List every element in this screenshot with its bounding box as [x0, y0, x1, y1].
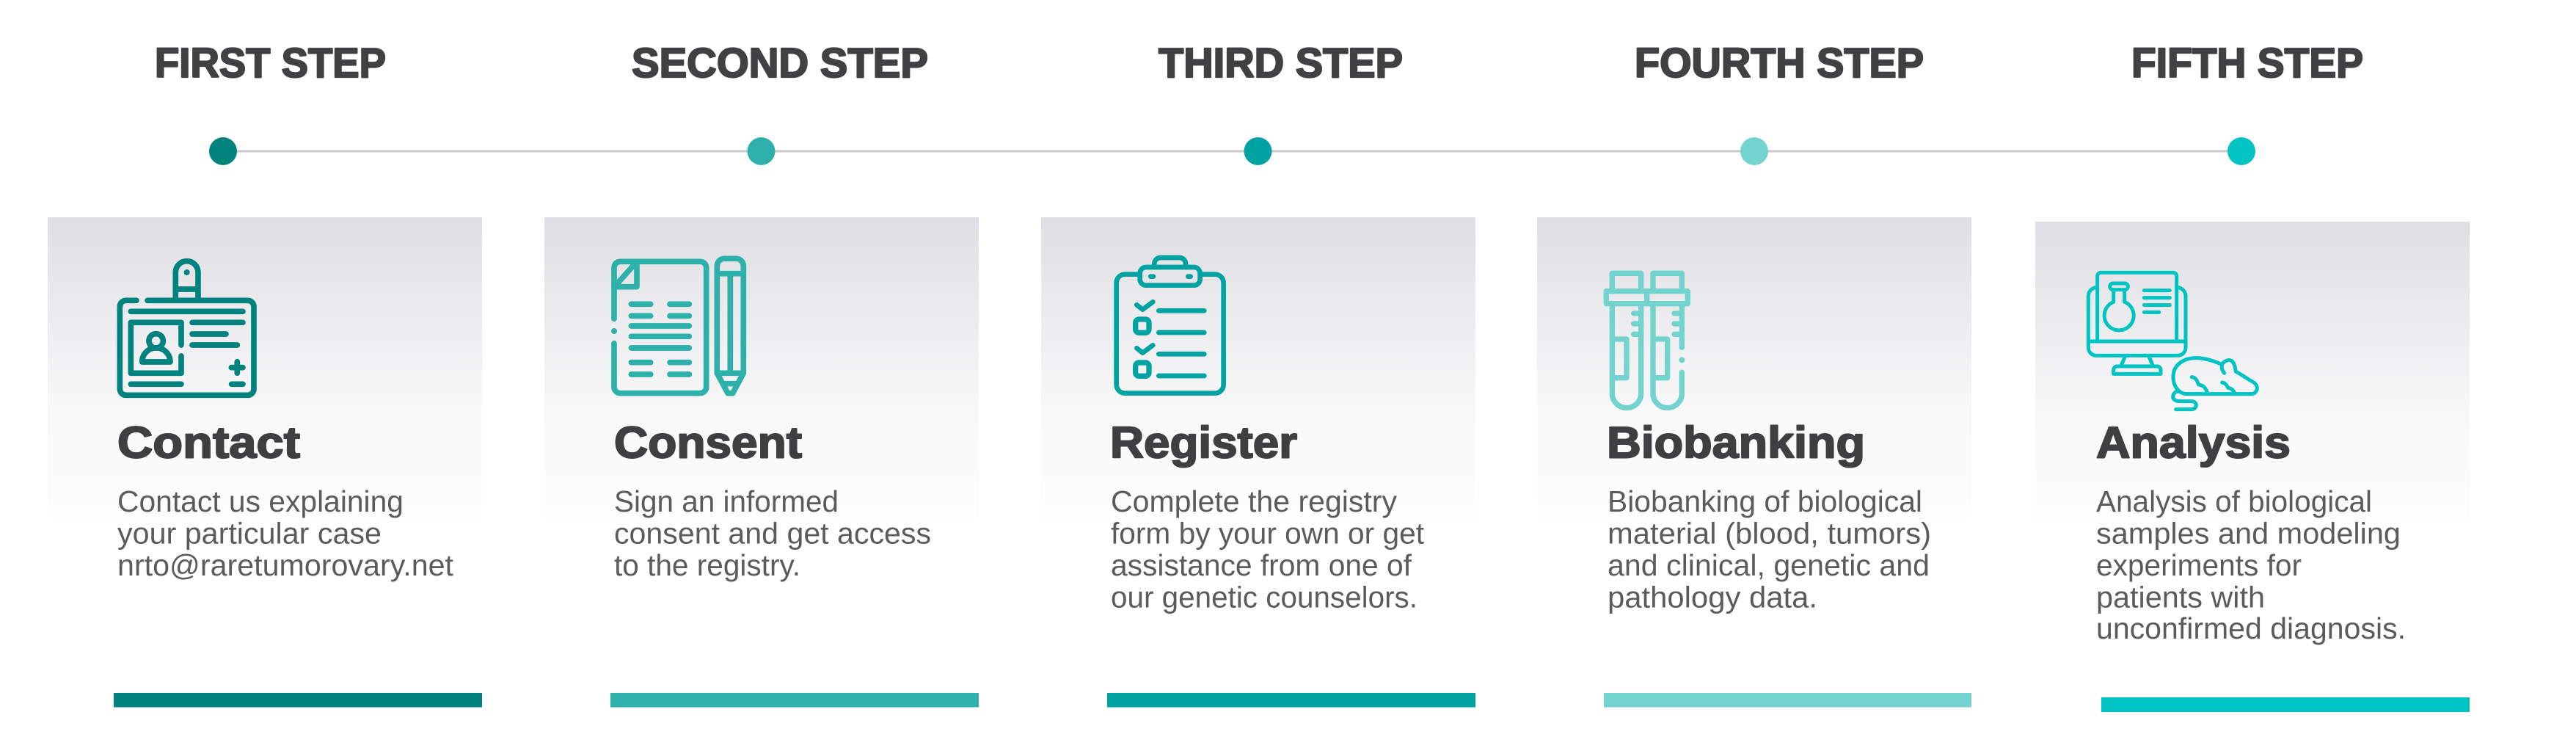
heading: first step: FIRST STEP	[155, 40, 386, 87]
icon: document and pencil	[611, 258, 743, 393]
colour bar 5	[2101, 697, 2470, 712]
icon: id badge	[120, 261, 254, 395]
title: biobanking: Biobanking	[1607, 418, 1865, 467]
heading: second step: SECOND STEP	[632, 40, 928, 87]
panel: biobanking	[1537, 217, 1971, 614]
description: register: assistance from one of	[1111, 548, 1412, 582]
description: consent	[614, 484, 931, 582]
description: contact: nrto@raretumorovary.net	[117, 548, 454, 582]
heading: fifth step: FIFTH STEP	[2131, 40, 2363, 87]
description: register: our genetic counselors.	[1111, 580, 1417, 614]
timeline	[209, 137, 2255, 165]
heading: fourth step: FOURTH STEP	[1635, 40, 1924, 87]
description: analysis	[2096, 484, 2406, 645]
description: contact	[117, 484, 454, 582]
panel: consent	[544, 217, 979, 582]
timeline dot 2	[747, 137, 775, 165]
colour bar 3	[1107, 693, 1475, 708]
colour bar 2	[610, 693, 979, 708]
description: biobanking: Biobanking of biological	[1608, 484, 1922, 518]
description: register	[1111, 484, 1425, 614]
title: register: Register	[1110, 418, 1297, 467]
timeline dot 3	[1244, 137, 1272, 165]
description: biobanking: and clinical, genetic and	[1608, 548, 1930, 582]
description: consent: to the registry.	[614, 548, 800, 582]
icon: test tubes	[1606, 273, 1687, 408]
description: contact: your particular case	[117, 517, 382, 551]
timeline dot 5	[2227, 137, 2255, 165]
description: biobanking: material (blood, tumors)	[1608, 517, 1931, 551]
title: contact: Contact	[117, 418, 300, 467]
panel: contact	[48, 217, 482, 582]
description: analysis: Analysis of biological	[2096, 484, 2372, 518]
heading: third step: THIRD STEP	[1159, 40, 1403, 87]
description: analysis: unconfirmed diagnosis.	[2096, 611, 2406, 645]
description: consent: consent and get access	[614, 517, 931, 551]
description: register: Complete the registry	[1111, 484, 1397, 518]
title: analysis: Analysis	[2096, 418, 2291, 467]
description: analysis: patients with	[2096, 580, 2265, 614]
description: biobanking: pathology data.	[1608, 580, 1817, 614]
title: consent: Consent	[614, 418, 802, 467]
description: contact: Contact us explaining	[117, 484, 404, 518]
description: analysis: experiments for	[2096, 548, 2302, 582]
description: analysis: samples and modeling	[2096, 517, 2401, 551]
panel: register	[1041, 217, 1475, 614]
panel: analysis	[2035, 222, 2470, 645]
colour bar 4	[1604, 693, 1971, 708]
description: register: form by your own or get	[1111, 517, 1425, 551]
timeline dot 1	[209, 137, 237, 165]
icon: computer with flask and mouse	[2088, 272, 2257, 410]
description: consent: Sign an informed	[614, 484, 839, 518]
icon: clipboard checklist	[1117, 258, 1224, 393]
colour bar 1	[114, 693, 482, 708]
timeline dot 4	[1740, 137, 1768, 165]
description: biobanking	[1608, 484, 1931, 614]
